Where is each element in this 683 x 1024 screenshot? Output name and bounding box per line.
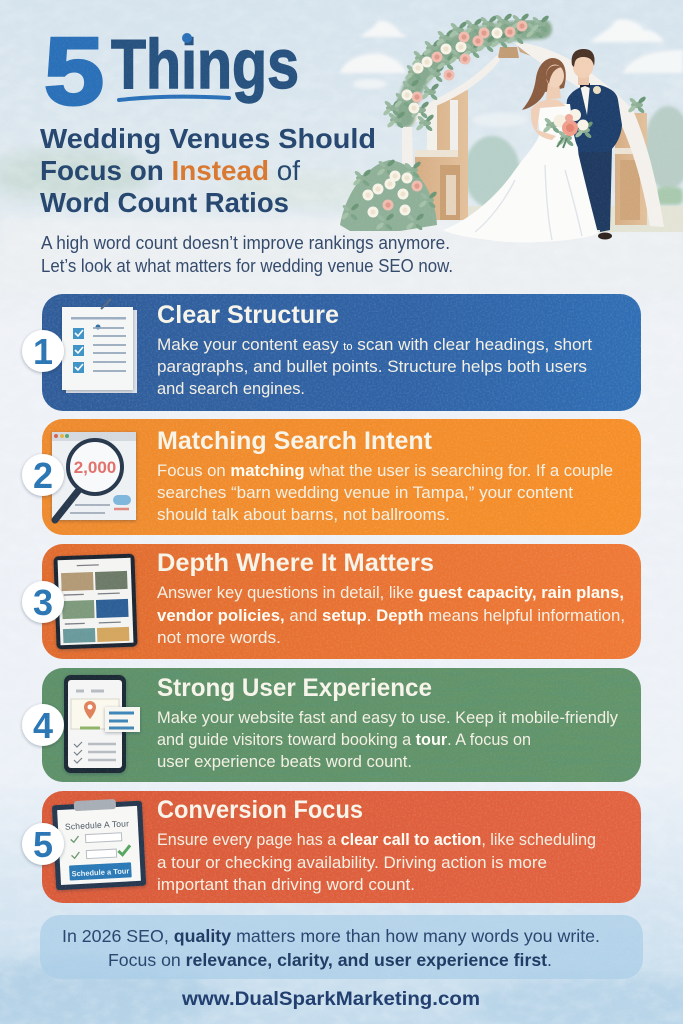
heading: Conversion Focus	[157, 796, 363, 824]
number badge	[22, 823, 64, 865]
body text: a tour or checking availability. Driving action is more	[157, 853, 547, 872]
bouquet	[542, 109, 594, 148]
heading: Strong User Experience	[157, 674, 432, 702]
couple	[443, 49, 622, 242]
body text: and search engines.	[157, 379, 305, 398]
number badge	[22, 581, 64, 623]
body text: Answer key questions in detail, like guest capacity, rain plans,	[157, 583, 624, 602]
subtitle heading: Wedding Venues Should	[40, 123, 376, 154]
icon: tablet gallery	[53, 554, 138, 649]
body text	[157, 708, 618, 771]
icon: checklist	[62, 299, 137, 393]
panel: conversion focus	[22, 791, 641, 903]
groom	[567, 49, 622, 240]
heading: Clear Structure	[157, 301, 339, 329]
heading: Depth Where It Matters	[157, 549, 434, 577]
body text: paragraphs, and bullet points. Structure helps both users	[157, 357, 587, 376]
icon: phone with map pin	[64, 675, 140, 773]
number badge: 5	[33, 824, 53, 865]
callout: closing message	[40, 915, 643, 979]
body text: not more words.	[157, 628, 281, 647]
body text: user experience beats word count.	[157, 752, 412, 771]
website url: www.DualSparkMarketing.com	[181, 988, 480, 1010]
panel: strong user experience	[22, 668, 641, 782]
body text: should talk about barns, not ballrooms.	[157, 505, 450, 524]
body text: Focus on matching what the user is searching for. If a couple	[157, 461, 613, 480]
title: 5 Things	[44, 18, 299, 125]
body text	[157, 335, 592, 398]
body text: searches “barn wedding venue in Tampa,” your content	[157, 483, 573, 502]
number badge: 2	[33, 455, 53, 496]
drapes	[402, 42, 664, 227]
number badge	[22, 330, 64, 372]
panel: matching search intent	[22, 419, 641, 535]
intro text	[41, 233, 453, 276]
panel: depth where it matters	[22, 544, 641, 659]
arch wood posts	[415, 44, 647, 225]
subtitle heading	[40, 123, 376, 218]
intro text: A high word count doesn’t improve rankings anymore.	[41, 233, 450, 253]
number badge	[22, 704, 64, 746]
subtitle heading: Word Count Ratios	[40, 187, 289, 218]
body text: and guide visitors toward booking a tour. A focus on	[157, 730, 531, 749]
title: 5 Things: Things	[111, 25, 299, 103]
bride	[443, 58, 598, 242]
icon: clipboard: Schedule a Tour	[71, 866, 130, 878]
body text	[157, 830, 596, 894]
number badge: 1	[33, 331, 53, 372]
title: 5 Things: 5	[44, 18, 104, 125]
number badge: 4	[33, 705, 53, 746]
icon: clipboard: Schedule A Tour	[65, 818, 129, 832]
floral garland	[382, 12, 647, 132]
body text: Make your website fast and easy to use. Keep it mobile-friendly	[157, 708, 618, 727]
heading: Matching Search Intent	[157, 427, 433, 455]
body text: vendor policies, and setup. Depth means helpful information,	[157, 606, 625, 625]
icon: magnifier over page: 2,000	[74, 458, 116, 477]
icon: clipboard	[52, 798, 146, 890]
icon: magnifier over page	[52, 432, 136, 520]
rose bush	[340, 158, 438, 231]
body text: important than driving word count.	[157, 875, 415, 894]
panel: clear structure	[22, 294, 641, 411]
intro text: Let’s look at what matters for wedding venue SEO now.	[41, 256, 453, 276]
body text: Make your content easy to scan with clear headings, short	[157, 335, 592, 354]
number badge	[22, 454, 64, 496]
illustration: wedding arch and couple	[340, 12, 664, 242]
subtitle heading: Focus on Instead of	[40, 155, 300, 186]
callout: closing message: In 2026 SEO, quality matters more than how many words you write.	[62, 926, 600, 946]
number badge: 3	[33, 582, 53, 623]
callout: closing message: Focus on relevance, clarity, and user experience first.	[108, 950, 552, 970]
body text: Ensure every page has a clear call to action, like scheduling	[157, 830, 596, 849]
body text	[157, 583, 625, 647]
distant trees and clouds	[340, 19, 683, 232]
body text	[157, 461, 613, 524]
